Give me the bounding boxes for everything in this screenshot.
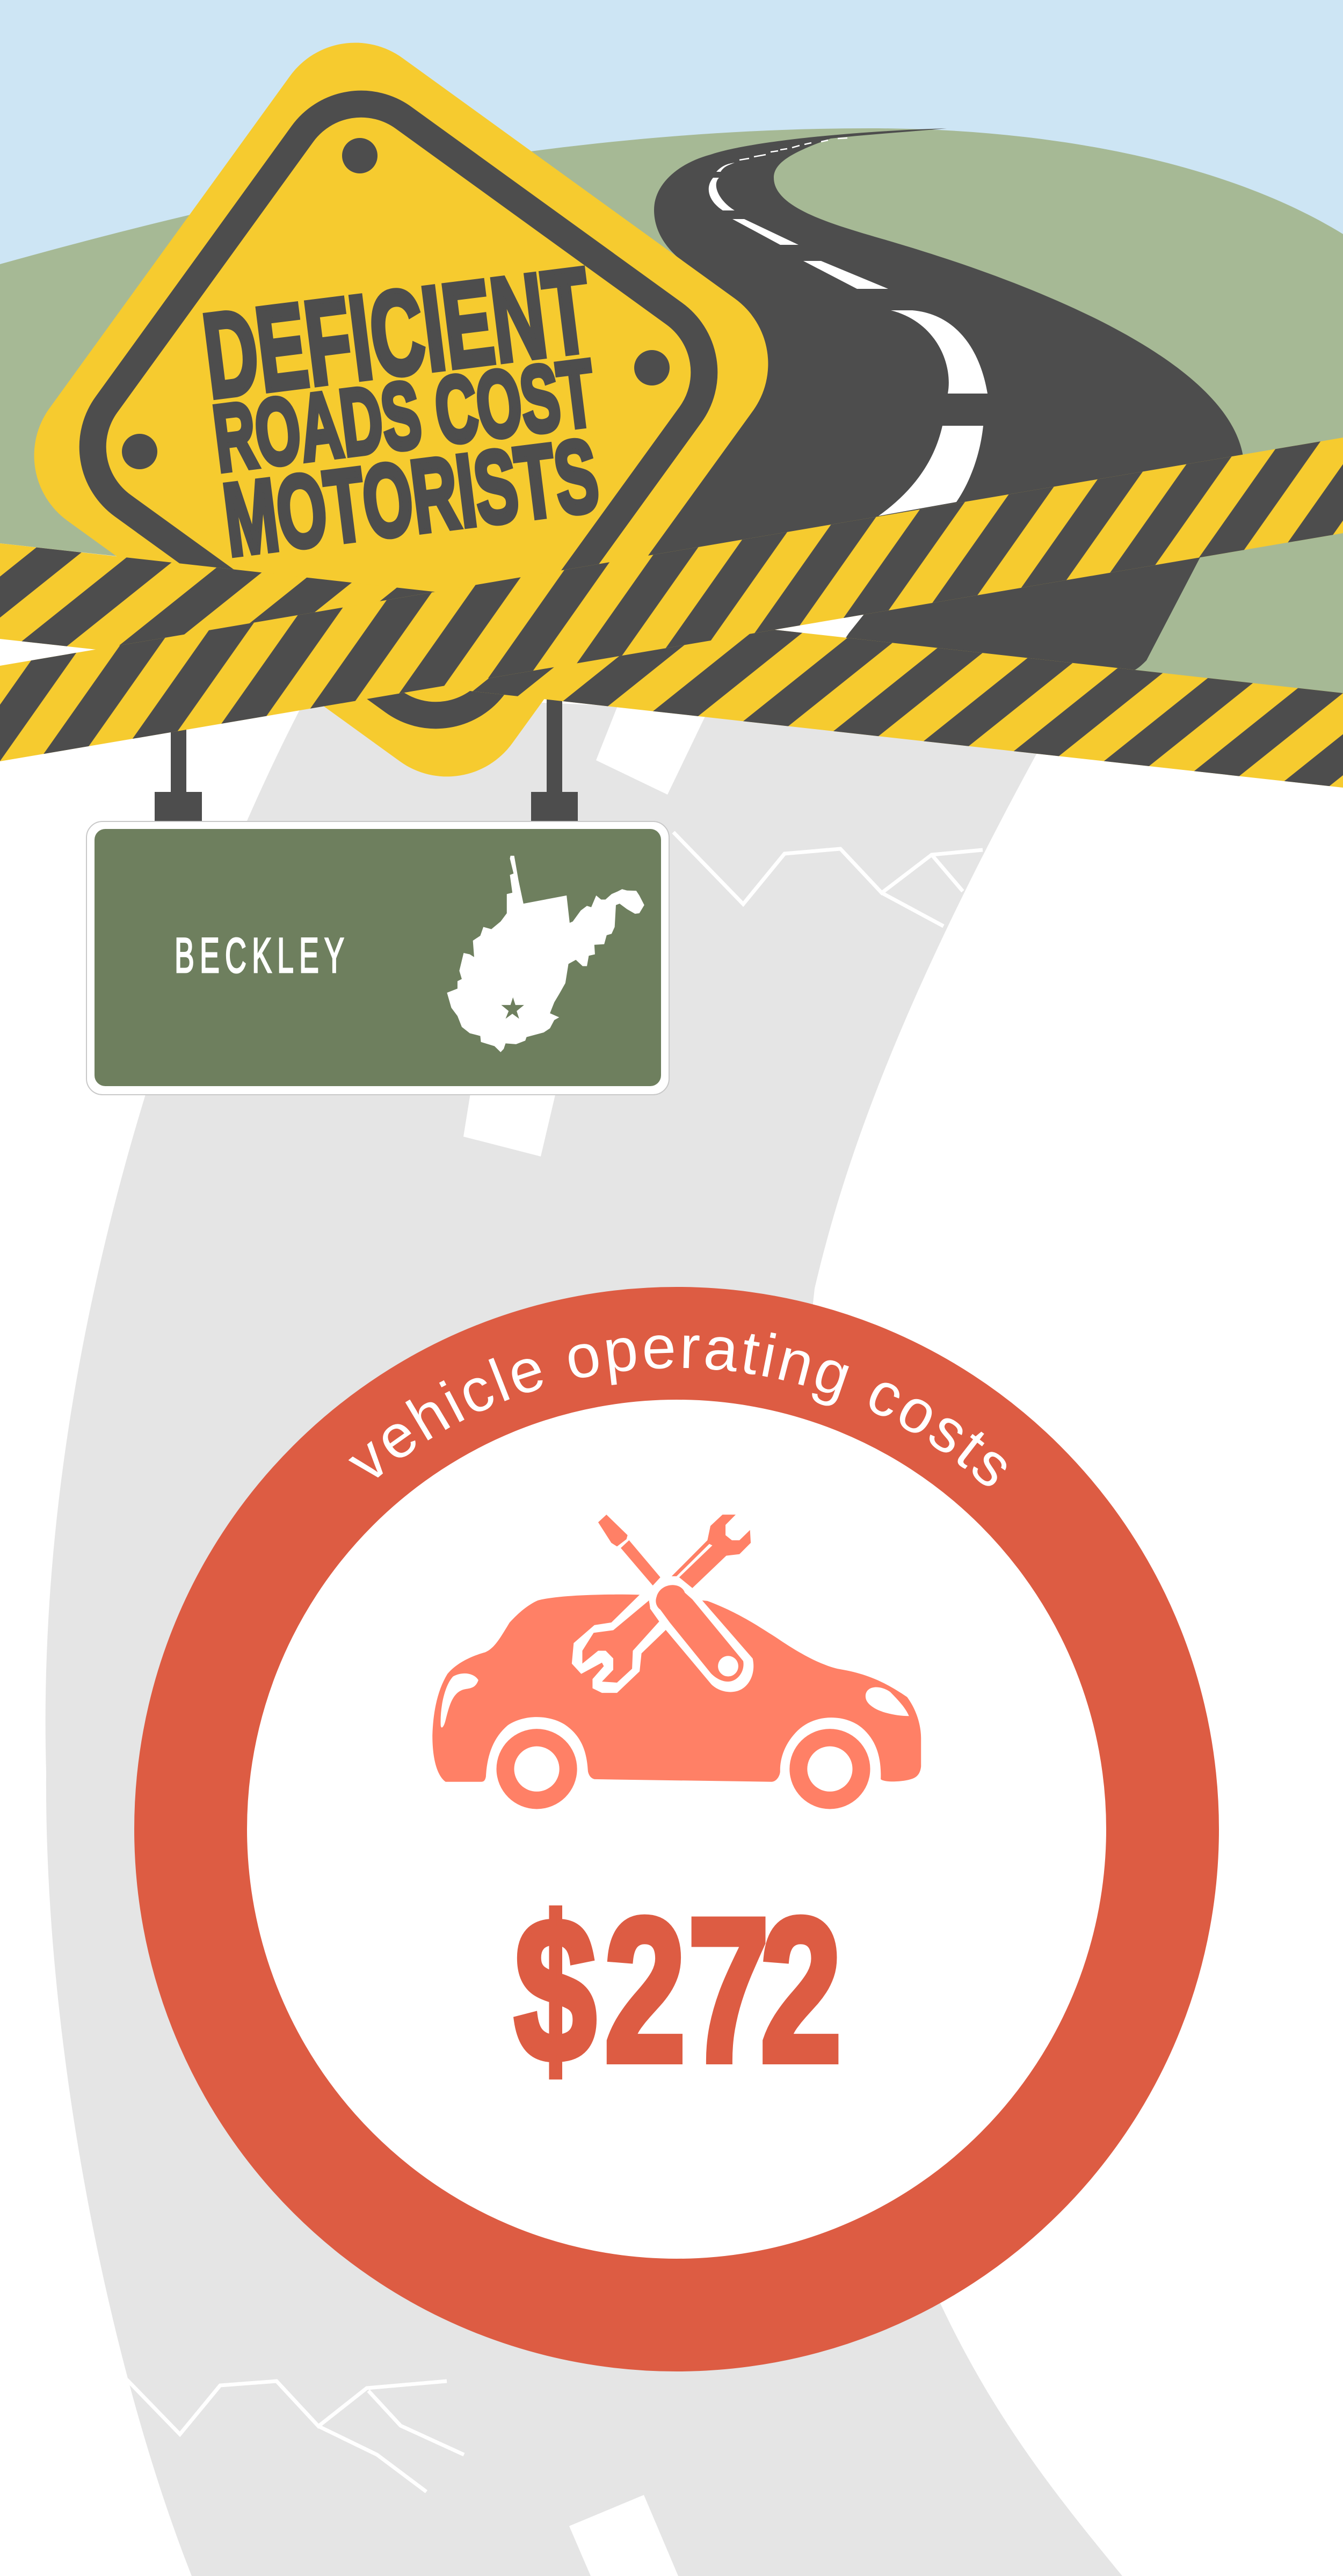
sign frame	[86, 821, 669, 1095]
sign posts	[155, 693, 578, 822]
title: MOTORISTS	[218, 417, 604, 578]
hazard tape: descending	[0, 543, 1343, 788]
cost figure: $272	[514, 1877, 841, 2105]
road dash: middle	[463, 1047, 567, 1156]
sign board	[2, 11, 800, 809]
icon: car with crossed tools	[432, 1515, 921, 1809]
hazard tape: ascending	[0, 438, 1343, 761]
bolts	[122, 138, 670, 469]
title: ROADS COST	[208, 340, 600, 491]
car body	[432, 1595, 921, 1782]
rear wheel	[789, 1729, 870, 1809]
front wheel	[497, 1729, 577, 1809]
sky	[0, 0, 1343, 322]
road centre dashes	[709, 163, 988, 516]
icon: West Virginia map	[447, 856, 644, 1052]
crack: upper	[673, 832, 983, 926]
green city sign	[86, 821, 669, 1095]
crack: lower	[127, 2379, 464, 2492]
road dash: bottom	[569, 2495, 678, 2576]
sign panel	[95, 829, 661, 1086]
vehicle operating costs circle	[169, 1287, 1185, 2337]
diamond warning sign	[2, 11, 800, 809]
orange ring	[191, 1343, 1163, 2315]
city name: BECKLEY	[175, 928, 350, 984]
wrench	[572, 1515, 751, 1693]
headlight	[441, 1673, 478, 1728]
road dash: top	[596, 698, 709, 795]
tail light	[866, 1687, 909, 1716]
sign border	[64, 75, 733, 744]
title: DEFICIENT	[197, 243, 598, 424]
screwdriver	[598, 1515, 753, 1692]
green hills	[0, 128, 1343, 698]
grey road receding into the distance	[46, 693, 1122, 2576]
curved heading: vehicle operating costs	[348, 1333, 1006, 1486]
title	[197, 243, 604, 578]
winding dark road	[591, 128, 1243, 674]
